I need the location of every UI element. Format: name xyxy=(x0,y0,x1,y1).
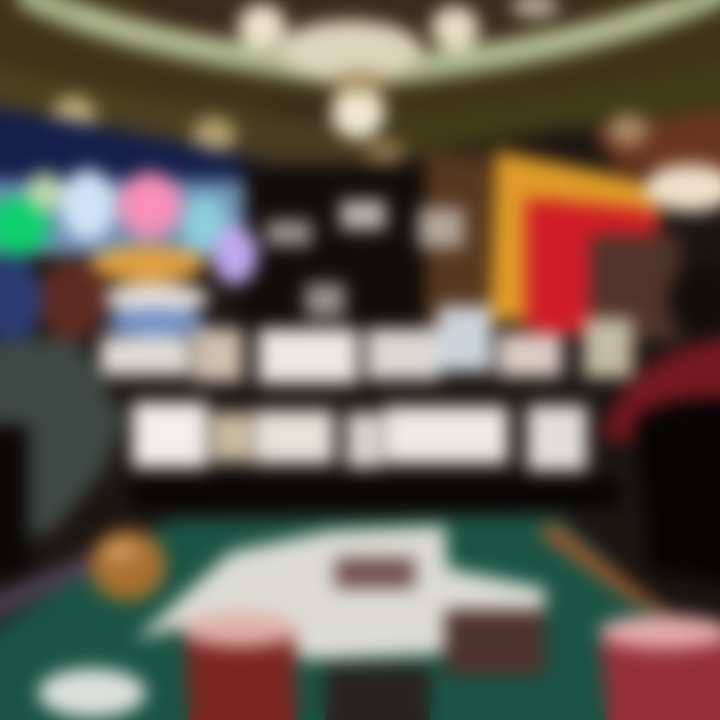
ceiling xyxy=(0,0,720,180)
brown stack on cards xyxy=(325,558,545,720)
left navy wall xyxy=(0,100,270,340)
chandelier xyxy=(52,0,648,167)
red cups xyxy=(182,613,720,720)
background base xyxy=(0,0,720,560)
ceiling arc moulding xyxy=(30,0,720,74)
bottom edge backdrop xyxy=(0,680,720,720)
white cards on the table xyxy=(38,525,545,718)
colourful screen xyxy=(0,169,258,336)
central dark wall xyxy=(130,155,620,508)
right person xyxy=(600,262,720,590)
orange and red panel xyxy=(490,150,720,340)
orange ball xyxy=(90,529,166,601)
left person xyxy=(0,260,125,575)
white blotches grid xyxy=(100,200,633,471)
green table xyxy=(0,515,720,720)
